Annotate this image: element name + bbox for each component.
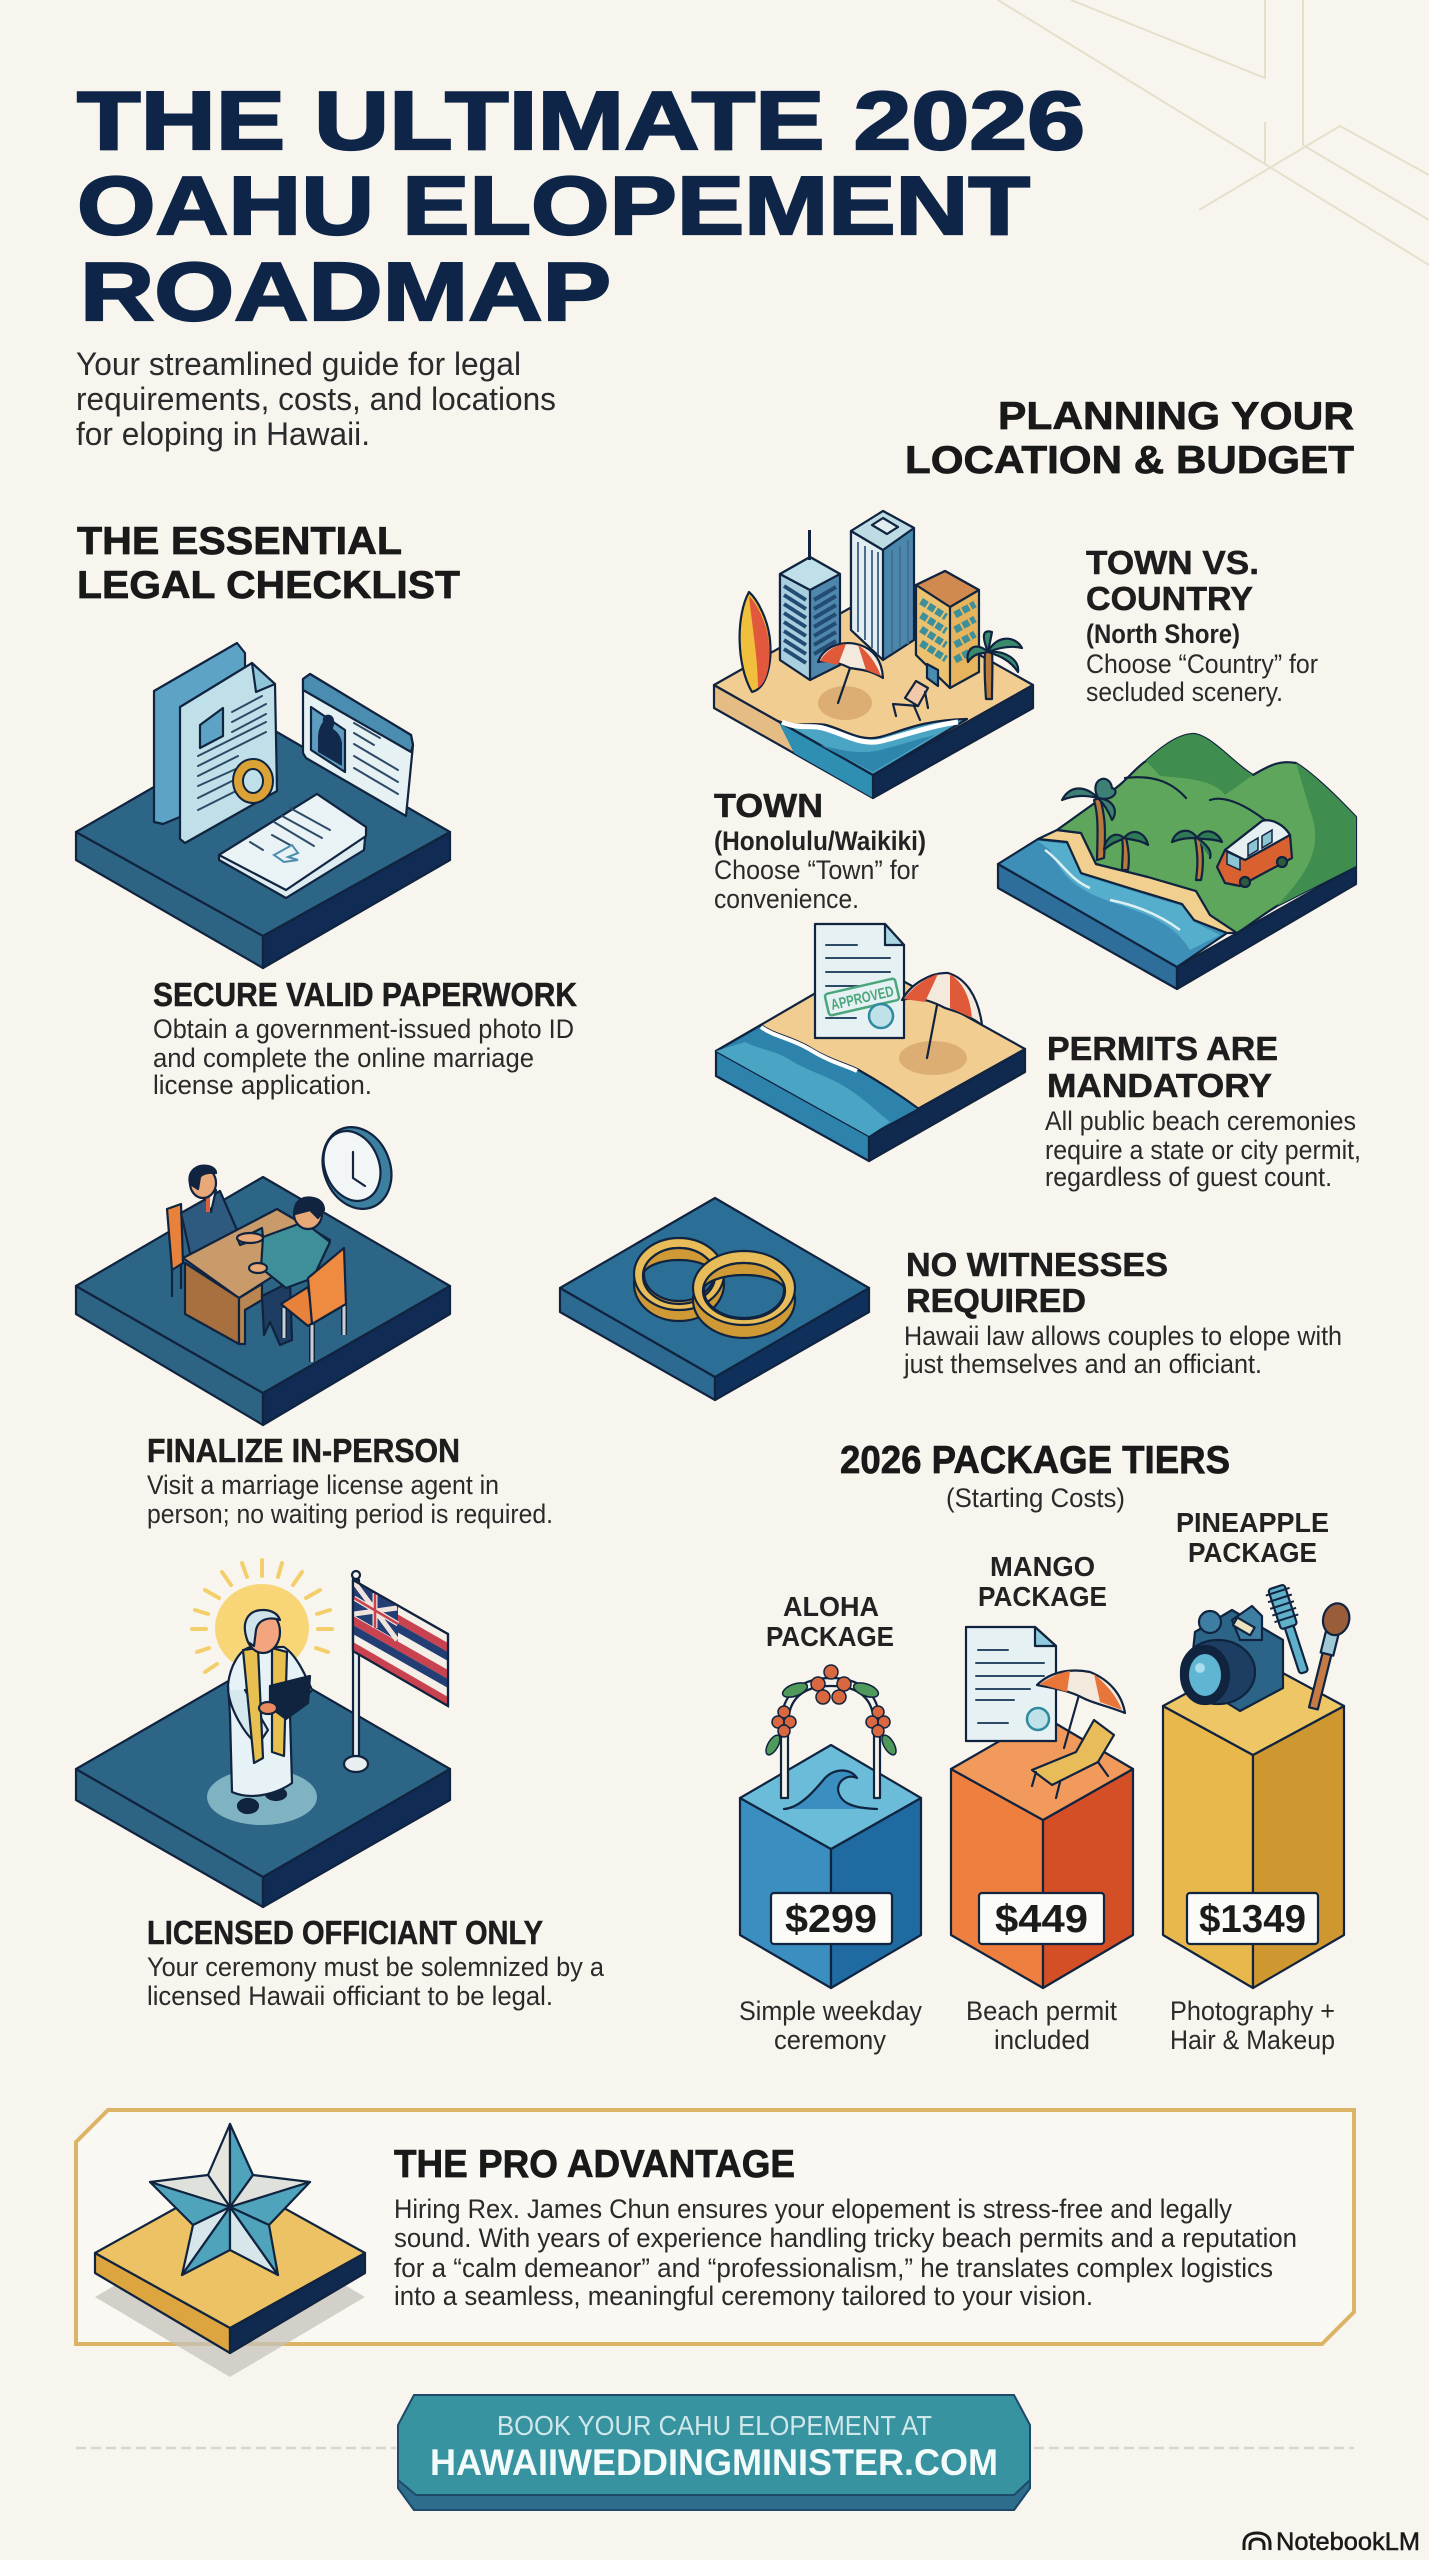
panel: the pro advantage [76, 2110, 1354, 2377]
callout frame [76, 2110, 1354, 2344]
title [77, 74, 1085, 338]
text: permits are mandatory [1045, 1030, 1361, 1192]
aloha package: PACKAGE [766, 1621, 894, 1652]
text: town: (Honolulu/Waikiki) [714, 826, 926, 856]
subtitle [76, 346, 556, 452]
text: permits are mandatory: MANDATORY [1047, 1067, 1272, 1104]
text: permits are mandatory: All public beach ceremonies [1045, 1106, 1356, 1136]
title: OAHU ELOPEMENT [77, 159, 1030, 252]
text: finalize in person: Visit a marriage license agent in [147, 1470, 499, 1500]
icon: officiant and Hawaii flag [76, 1560, 450, 1907]
mango package: $449 [995, 1898, 1088, 1941]
text: licensed officiant only: Your ceremony must be solemnized by a [147, 1952, 605, 1982]
heading: the essential legal checklist: LEGAL CHECKLIST [77, 564, 460, 607]
text: pro advantage: sound. With years of experience handling tricky beach permits and a reputation [394, 2223, 1297, 2253]
text: town vs country [1086, 544, 1318, 707]
text: finalize in person [147, 1432, 553, 1529]
text: pro advantage: for a “calm demeanor” and “professionalism,” he translates complex logistics [394, 2253, 1273, 2283]
aloha package: ceremony [774, 2025, 886, 2055]
text: no witnesses required: NO WITNESSES [906, 1246, 1168, 1283]
panel: 2026 package tiers [739, 1439, 1353, 2055]
text: town [714, 787, 926, 914]
call to action button: HAWAIIWEDDINGMINISTER.COM [430, 2442, 998, 2483]
text: no witnesses required: just themselves and an officiant. [903, 1349, 1262, 1379]
text: secure valid paperwork: and complete the online marriage [153, 1043, 534, 1073]
mango package [951, 1551, 1133, 2055]
panel: town vs country [998, 544, 1356, 989]
icon: town beach tile [714, 511, 1033, 798]
mango package: MANGO [990, 1551, 1095, 1582]
mango package: Beach permit [966, 1996, 1117, 2026]
text: town vs country: Choose “Country” for [1086, 649, 1318, 679]
text: pro advantage: into a seamless, meaningful ceremony tailored to your vision. [394, 2281, 1093, 2311]
icon: wedding rings tile [560, 1198, 869, 1400]
icon: paperwork on platform [76, 643, 450, 968]
pineapple package: $1349 [1199, 1898, 1306, 1941]
text: pro advantage [394, 2143, 1297, 2311]
text: town: convenience. [714, 884, 859, 914]
panel: finalize in person [76, 1117, 553, 1529]
text: town vs country: (North Shore) [1086, 619, 1240, 649]
icon: meeting with license agent [76, 1117, 450, 1425]
text: permits are mandatory: PERMITS ARE [1047, 1030, 1278, 1067]
panel: secure valid paperwork [76, 643, 577, 1100]
text: finalize in person: person; no waiting period is required. [147, 1499, 553, 1529]
text: secure valid paperwork: Obtain a government-issued photo ID [153, 1014, 574, 1044]
text: secure valid paperwork: license application. [153, 1070, 372, 1100]
text: secure valid paperwork: SECURE VALID PAPERWORK [153, 976, 577, 1013]
aloha package: ALOHA [783, 1591, 879, 1622]
call to action button [398, 2395, 1030, 2510]
heading: package tiers: (Starting Costs) [946, 1483, 1125, 1513]
icon: star on gold tile [95, 2124, 365, 2377]
pineapple package: PACKAGE [1188, 1537, 1317, 1568]
subtitle: Your streamlined guide for legal [76, 346, 521, 382]
icon: permit on beach tile: APPROVED [829, 983, 896, 1014]
text: town: Choose “Town” for [714, 855, 919, 885]
NotebookLM logo: NotebookLM [1276, 2528, 1420, 2556]
title: THE ULTIMATE 2026 [77, 74, 1085, 167]
aloha package: Simple weekday [739, 1996, 922, 2026]
pineapple package: PINEAPPLE [1176, 1507, 1329, 1538]
text: licensed officiant only: LICENSED OFFICIANT ONLY [147, 1914, 543, 1951]
text: town vs country: secluded scenery. [1086, 677, 1283, 707]
icon: country coast tile [998, 734, 1356, 989]
panel: licensed officiant only [76, 1560, 605, 2011]
text: no witnesses required: REQUIRED [906, 1282, 1086, 1319]
text: no witnesses required: Hawaii law allows couples to elope with [904, 1321, 1342, 1351]
heading: package tiers [840, 1439, 1230, 1513]
panel: no witnesses required [560, 1198, 1342, 1400]
text: no witnesses required [903, 1246, 1342, 1379]
heading: package tiers: 2026 PACKAGE TIERS [840, 1439, 1230, 1482]
aloha package: $299 [785, 1898, 877, 1941]
text: pro advantage: Hiring Rex. James Chun ensures your elopement is stress-free and legally [394, 2194, 1232, 2224]
panel: town [714, 511, 1033, 914]
heading: planning your location and budget: PLANNING YOUR [998, 395, 1354, 438]
panel: permits are mandatory [716, 924, 1361, 1192]
text: permits are mandatory: require a state or city permit, [1045, 1135, 1361, 1165]
text: town vs country: COUNTRY [1086, 580, 1253, 617]
text: town vs country: TOWN VS. [1086, 544, 1259, 581]
text: secure valid paperwork [153, 976, 577, 1100]
heading: planning your location and budget [905, 395, 1354, 482]
subtitle: requirements, costs, and locations [76, 381, 556, 417]
pineapple package [1163, 1507, 1353, 2055]
heading: planning your location and budget: LOCATION & BUDGET [905, 439, 1354, 482]
text: pro advantage: THE PRO ADVANTAGE [394, 2143, 795, 2186]
subtitle: for eloping in Hawaii. [76, 416, 370, 452]
text: licensed officiant only: licensed Hawaii officiant to be legal. [147, 1981, 553, 2011]
heading: the essential legal checklist [77, 520, 460, 607]
mango package: included [994, 2025, 1090, 2055]
title: ROADMAP [80, 245, 611, 338]
text: permits are mandatory: regardless of guest count. [1045, 1162, 1332, 1192]
call to action button: BOOK YOUR CAHU ELOPEMENT AT [497, 2410, 932, 2441]
pineapple package: Hair & Makeup [1170, 2025, 1335, 2055]
heading: the essential legal checklist: THE ESSENTIAL [77, 520, 402, 563]
pineapple package: Photography + [1170, 1996, 1335, 2026]
text: licensed officiant only [147, 1914, 605, 2011]
icon: permit on beach tile [716, 924, 1025, 1161]
mango package: PACKAGE [978, 1581, 1107, 1612]
text: town: TOWN [714, 787, 823, 824]
aloha package [739, 1591, 922, 2055]
text: finalize in person: FINALIZE IN-PERSON [147, 1432, 460, 1469]
